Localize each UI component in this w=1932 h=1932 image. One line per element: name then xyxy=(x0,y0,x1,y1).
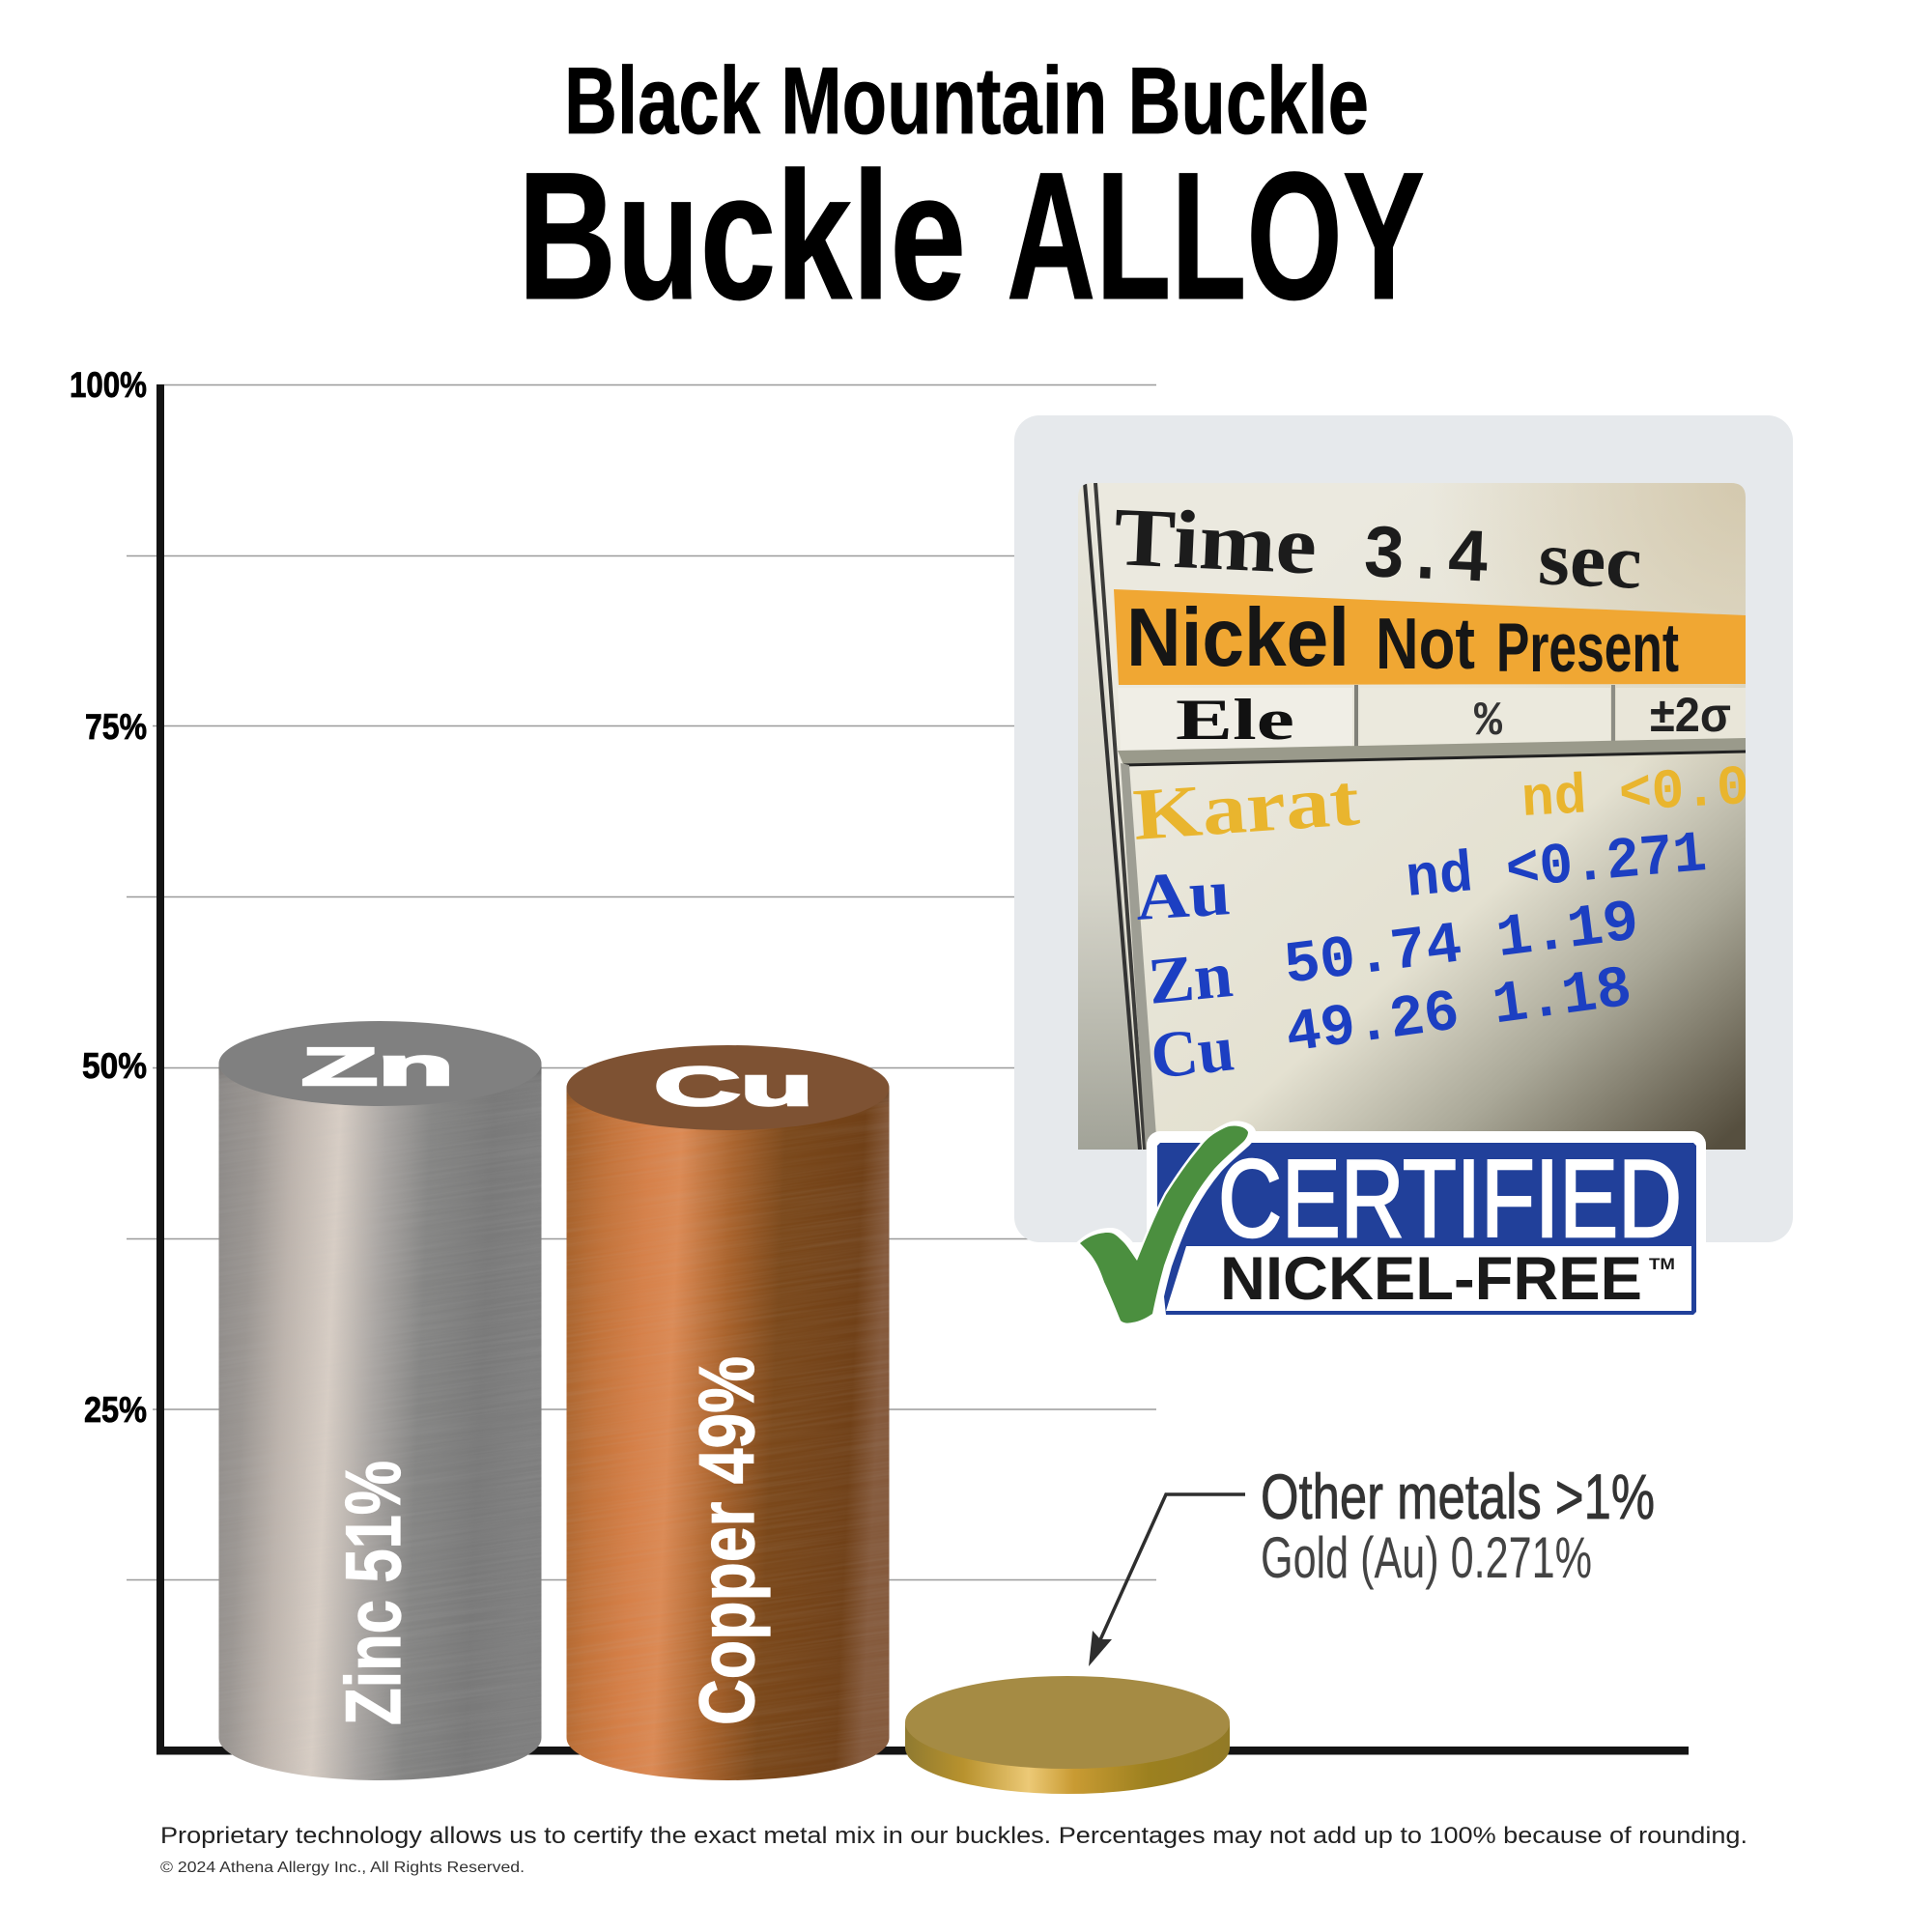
disc: gold xyxy=(905,1676,1230,1794)
screen text: Nickel Not Present: Present xyxy=(1496,611,1679,687)
orange alert band xyxy=(1114,589,1746,685)
screen text: Au, Zn, Cu rows xyxy=(1133,822,1709,1093)
screen text: Time 3.4 sec: 3.4 xyxy=(1361,514,1492,605)
badge: Certified Nickel-Free xyxy=(1080,1125,1706,1323)
axis label 75%: 75% xyxy=(85,707,147,747)
screen text: Karat row: Karat xyxy=(1130,759,1362,856)
screen text: Time 3.4 sec xyxy=(1116,510,1640,588)
screen text: Karat row: nd <0.0 xyxy=(1520,757,1751,833)
table header row: % xyxy=(1474,695,1503,750)
title: Black Mountain Buckle: Black Mountain Buckle xyxy=(564,47,1369,154)
screen text: Au, Zn, Cu rows: 49.26 1.18 xyxy=(1282,956,1635,1069)
callout: Gold percent: Gold (Au) 0.271% xyxy=(1261,1525,1592,1590)
cylinder top label: Zn: Zn xyxy=(301,1037,454,1096)
cylinder top label: Cu: Cu xyxy=(654,1056,813,1118)
title: Buckle ALLOY: Buckle xyxy=(518,134,966,337)
screen text: Time 3.4 sec: sec xyxy=(1537,516,1644,606)
screen text: Au, Zn, Cu rows: 50.74 1.19 xyxy=(1281,890,1642,1001)
screen text: Nickel Not Present: Nickel xyxy=(1126,592,1350,684)
screen text: Au, Zn, Cu rows: Cu xyxy=(1148,1010,1237,1093)
cylinder label: Zinc 51%: Zinc 51% xyxy=(330,1461,417,1725)
axis label 100%: 100% xyxy=(70,365,147,405)
axis label 25%: 25% xyxy=(84,1390,147,1430)
table header row: Ele xyxy=(1176,688,1294,752)
footnote: copyright: © 2024 Athena Allergy Inc., All Rights Reserved. xyxy=(160,1860,525,1876)
screen text: Karat row xyxy=(1133,766,1746,839)
panel: lab result background xyxy=(1014,415,1793,1242)
cylinder label: Copper 49%: Copper 49% xyxy=(684,1356,771,1725)
badge text: NICKEL-FREE: NICKEL-FREE xyxy=(1220,1245,1642,1313)
photo: XRF analyzer screen xyxy=(1078,483,1751,1150)
callout: Other metals: Other metals >1% xyxy=(1261,1461,1655,1532)
screen text: Au, Zn, Cu rows: Zn xyxy=(1145,937,1236,1018)
title: Buckle ALLOY: ALLOY xyxy=(1007,134,1425,337)
screen text: Au, Zn, Cu rows: Au xyxy=(1133,855,1233,934)
cylinder: copper xyxy=(566,1045,889,1780)
axis label 50%: 50% xyxy=(82,1046,147,1086)
screen text: Time 3.4 sec: Time xyxy=(1112,490,1319,592)
arrow: callout pointer to gold disc xyxy=(1089,1494,1245,1666)
screen text: Au, Zn, Cu rows: nd <0.271 xyxy=(1404,822,1709,914)
title: Buckle ALLOY xyxy=(518,134,1425,337)
chart axes and gridlines xyxy=(127,384,1689,1754)
badge text: trademark: TM xyxy=(1649,1255,1675,1273)
screen text: Nickel Not Present xyxy=(1131,606,1679,672)
icon: green checkmark xyxy=(1080,1125,1251,1323)
footnote: proprietary technology: Proprietary technology allows us to certify the exact metal mix in our buckles. Percentages may not add up to 100% because of rounding. xyxy=(160,1823,1747,1849)
table header row: ±2σ xyxy=(1650,688,1731,742)
cylinder: zinc xyxy=(218,1021,541,1780)
badge text: CERTIFIED: CERTIFIED xyxy=(1218,1138,1682,1261)
table header row xyxy=(1118,685,1746,752)
screen text: Nickel Not Present: Not xyxy=(1376,603,1475,684)
